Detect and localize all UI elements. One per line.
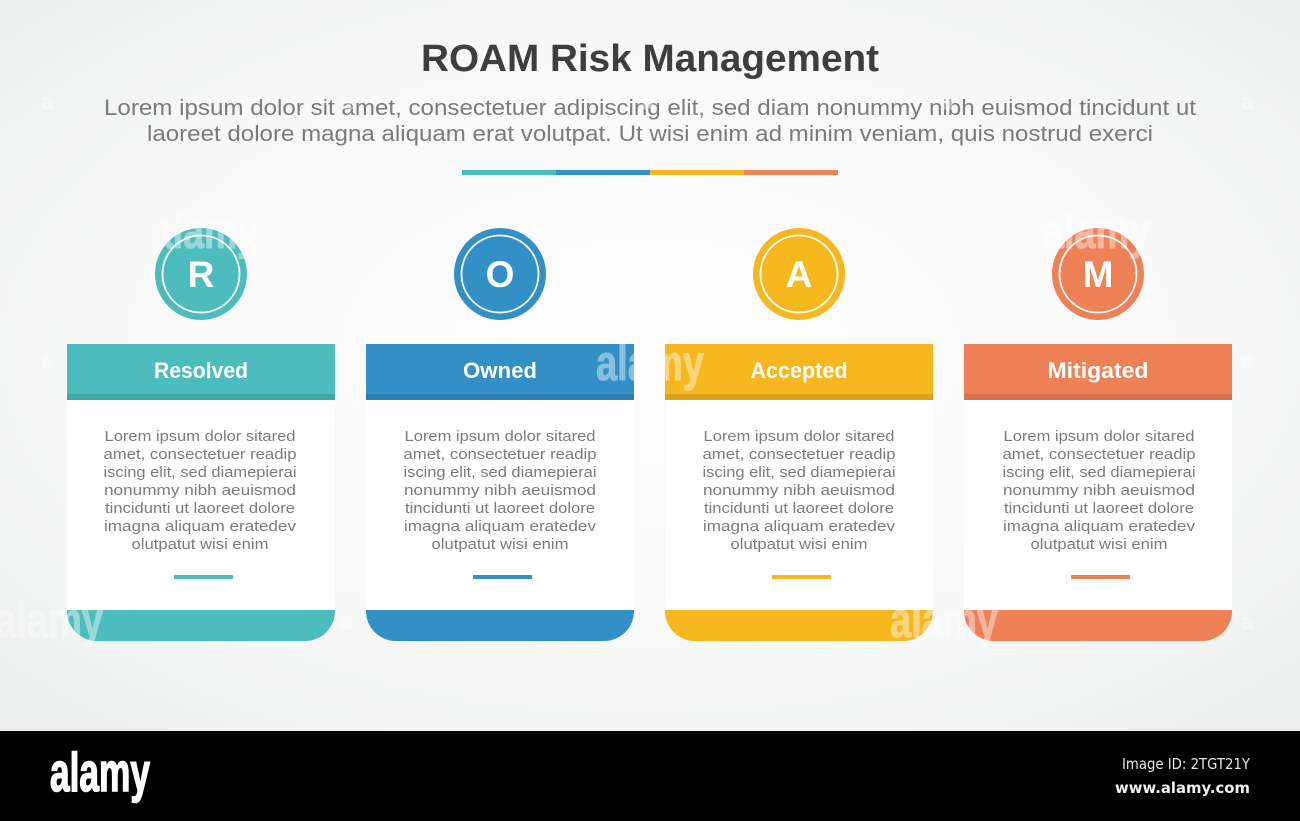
card body: Mitigated: amet, consectetuer readip	[1002, 447, 1196, 463]
footer bar	[0, 731, 1300, 821]
card footer: Owned	[366, 610, 634, 641]
card body: Accepted: amet, consectetuer readip	[702, 447, 896, 463]
icon: letter M badge	[1052, 228, 1144, 320]
watermarks: alamy	[152, 203, 258, 259]
watermarks: a	[941, 89, 954, 114]
watermarks: a	[340, 89, 353, 114]
card body: Owned: iscing elit, sed diamepierai	[404, 465, 596, 481]
card body: Mitigated: Lorem ipsum dolor sitared	[1004, 429, 1194, 445]
colour divider	[462, 170, 838, 175]
icon: letter O badge: O	[486, 254, 514, 295]
card body: Mitigated: olutpatut wisi enim	[1030, 537, 1168, 553]
icon: letter M badge: M	[1083, 254, 1113, 295]
card body: Accepted: olutpatut wisi enim	[730, 537, 868, 553]
card body: Resolved: amet, consectetuer readip	[104, 447, 296, 463]
website: www.alamy.com	[1115, 779, 1250, 797]
intro text: Lorem ipsum dolor sit amet, consectetuer adipiscing elit, sed diam nonummy nibh euismod tincidunt ut	[104, 95, 1197, 120]
card body: Owned	[366, 400, 634, 610]
watermarks: a	[1241, 609, 1254, 634]
watermarks: a	[1241, 89, 1254, 114]
card body: Owned: tincidunti ut laoreet dolore	[405, 501, 595, 517]
card body: Resolved: olutpatut wisi enim	[132, 537, 268, 553]
card body: Accepted: Lorem ipsum dolor sitared	[704, 429, 894, 445]
card body: Owned: amet, consectetuer readip	[404, 447, 596, 463]
card body: Mitigated: imagna aliquam eratedev	[1003, 519, 1196, 535]
card footer: Accepted	[665, 610, 933, 641]
card body: Accepted	[665, 400, 933, 610]
card body: Accepted: iscing elit, sed diamepierai	[702, 465, 896, 481]
card body: Accepted: nonummy nibh aeuismod	[703, 483, 895, 499]
watermarks: a	[642, 89, 655, 114]
card body: Owned: Lorem ipsum dolor sitared	[404, 429, 596, 445]
card body: Mitigated	[964, 400, 1232, 610]
panel: Resolved	[67, 228, 335, 641]
card body: Accepted: tincidunti ut laoreet dolore	[704, 501, 894, 517]
card body: Resolved: Lorem ipsum dolor sitared	[104, 429, 296, 445]
watermarks: a	[340, 609, 353, 634]
watermarks	[0, 89, 1254, 648]
watermarks: alamy	[890, 592, 998, 648]
alamy logo: alamy	[50, 741, 150, 803]
panel: Owned	[366, 228, 634, 641]
card footer: Resolved	[67, 610, 335, 641]
card header: Owned	[366, 344, 634, 400]
card header: Resolved: Resolved	[154, 358, 248, 383]
watermarks: a	[41, 89, 54, 114]
card header: Mitigated	[964, 344, 1232, 400]
card body: Owned: imagna aliquam eratedev	[404, 519, 597, 535]
intro text: laoreet dolore magna aliquam erat volutpat. Ut wisi enim ad minim veniam, quis nostrud exerci	[147, 121, 1153, 146]
panel: Mitigated	[964, 228, 1232, 641]
icon: letter R badge: R	[188, 254, 214, 295]
watermarks: a	[41, 349, 54, 374]
watermarks: a	[1241, 349, 1254, 374]
card footer: Mitigated	[964, 610, 1232, 641]
watermarks: alamy	[1043, 203, 1150, 259]
card body: Accepted: imagna aliquam eratedev	[703, 519, 896, 535]
icon: letter A badge	[753, 228, 845, 320]
card body: Owned: olutpatut wisi enim	[432, 537, 568, 553]
panel: Accepted	[665, 228, 933, 641]
card header: Resolved	[67, 344, 335, 400]
intro text	[104, 95, 1197, 146]
card body: Owned: nonummy nibh aeuismod	[404, 483, 596, 499]
card body: Resolved: iscing elit, sed diamepierai	[104, 465, 296, 481]
card header: Mitigated: Mitigated	[1048, 358, 1148, 383]
card body: Resolved	[67, 400, 335, 610]
card header: Accepted: Accepted	[750, 358, 848, 383]
image id: Image ID: 2TGT21Y	[1122, 755, 1251, 773]
card body: Mitigated: iscing elit, sed diamepierai	[1002, 465, 1196, 481]
icon: letter R badge	[155, 228, 247, 320]
card body: Mitigated: tincidunti ut laoreet dolore	[1004, 501, 1194, 517]
card body: Resolved: nonummy nibh aeuismod	[104, 483, 296, 499]
icon: letter A badge: A	[786, 254, 812, 295]
watermarks: alamy	[596, 335, 704, 391]
icon: letter O badge	[454, 228, 546, 320]
card header: Owned: Owned	[463, 358, 537, 383]
title: ROAM Risk Management	[421, 38, 879, 80]
card header: Accepted	[665, 344, 933, 400]
card body: Resolved: tincidunti ut laoreet dolore	[105, 501, 295, 517]
card body: Resolved: imagna aliquam eratedev	[104, 519, 297, 535]
card body: Mitigated: nonummy nibh aeuismod	[1003, 483, 1195, 499]
